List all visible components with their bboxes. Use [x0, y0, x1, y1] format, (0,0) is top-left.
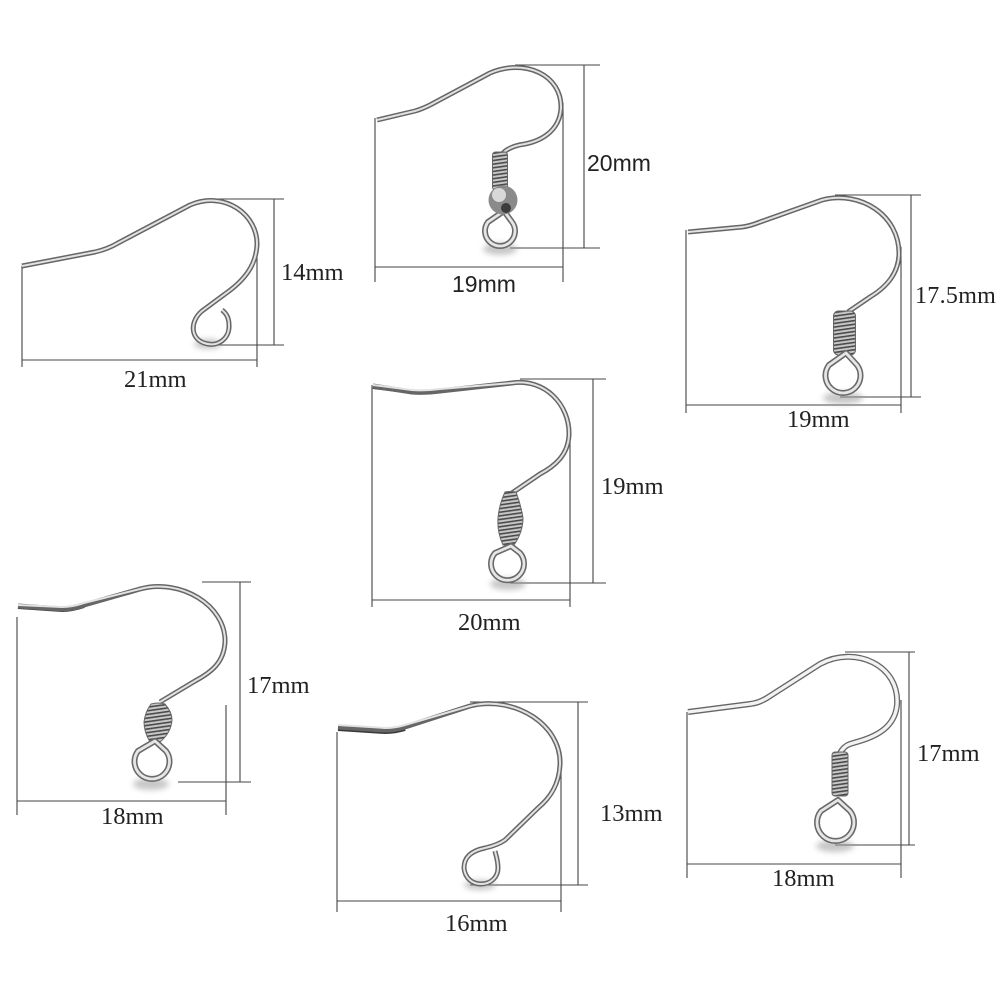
dimension lines: 19mm by 20mm [375, 65, 600, 282]
label: 18mm: 18mm [772, 865, 835, 892]
earring hook: 19mm by 17.5mm [686, 195, 996, 433]
label: 20mm: 20mm [587, 150, 651, 176]
coil [834, 311, 856, 355]
earring hook: 18mm by 17mm, barrel coil [17, 582, 310, 830]
earring hook: 19mm by 20mm, with ball [375, 65, 651, 297]
hook wire: ball style [377, 68, 561, 255]
hook wire: short coil [688, 198, 899, 404]
coil [144, 703, 172, 742]
earring hook: 21mm by 14mm, open loop [22, 199, 344, 393]
loop [134, 741, 170, 779]
hook wire: long coil [688, 657, 897, 852]
label: 17mm: 17mm [917, 740, 980, 767]
label: 17mm: 17mm [247, 672, 310, 699]
dimension lines: 20mm by 19mm [372, 379, 606, 607]
dimension lines: 18mm by 17mm [687, 652, 915, 878]
label: 19mm: 19mm [601, 473, 664, 500]
dimension lines: 18mm by 17mm [17, 582, 251, 815]
earring hook: 16mm by 13mm, plain loop [337, 702, 663, 937]
coil [498, 492, 523, 545]
loop [817, 800, 854, 841]
coil [832, 752, 848, 796]
hook wire: plain loop [338, 704, 560, 890]
label: 13mm: 13mm [600, 800, 663, 827]
dimension lines: 16mm by 13mm [337, 702, 588, 912]
earring hook: 18mm by 17mm, long coil [687, 652, 980, 892]
label: 21mm: 21mm [124, 366, 187, 393]
label: 17.5mm: 17.5mm [915, 283, 996, 309]
hook wire: open loop [22, 201, 257, 349]
loop [826, 353, 860, 393]
loop [491, 546, 524, 580]
dimension lines: 19mm by 17.5mm [686, 195, 921, 413]
hook wire: barrel coil [18, 587, 225, 790]
dimension lines: 21mm by 14mm [22, 199, 284, 367]
label: 20mm: 20mm [458, 609, 521, 636]
label: 14mm: 14mm [281, 259, 344, 286]
label: 19mm: 19mm [787, 406, 850, 433]
coil [492, 152, 508, 190]
ball [488, 186, 518, 214]
loop [485, 211, 515, 246]
label: 18mm: 18mm [101, 803, 164, 830]
label: 16mm: 16mm [445, 910, 508, 937]
label: 19mm: 19mm [452, 271, 516, 297]
hook wire: barrel coil [373, 382, 569, 590]
earring hook: 20mm by 19mm, barrel coil [372, 379, 664, 636]
